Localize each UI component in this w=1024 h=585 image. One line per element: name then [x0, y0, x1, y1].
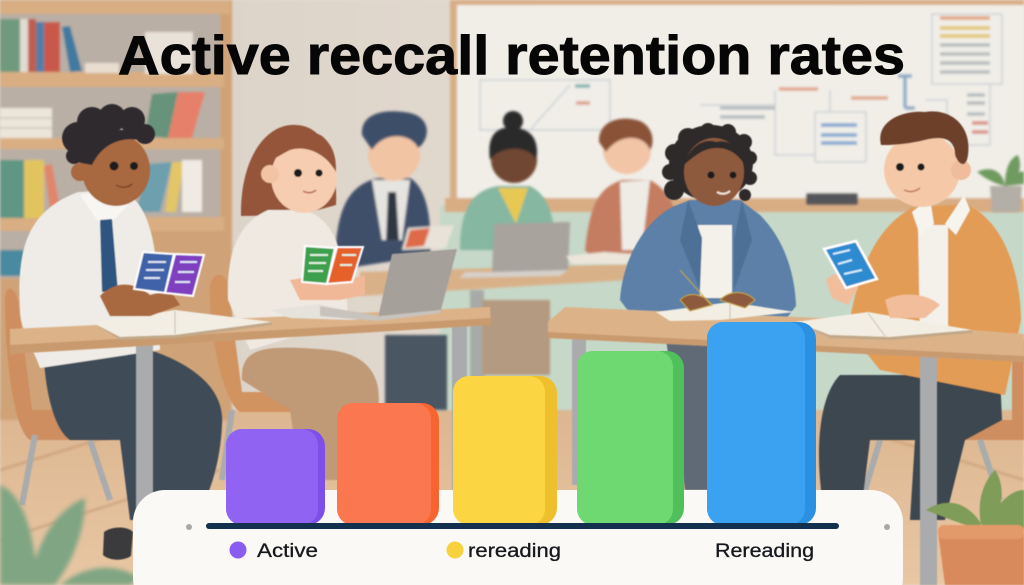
front laptop [270, 249, 457, 321]
open book on left desk [93, 310, 272, 340]
student 7: orange sweater [819, 111, 1021, 520]
student 1 chair [5, 289, 110, 505]
bookshelf [0, 0, 232, 420]
foreground plant left [0, 485, 140, 585]
student 6: blue blazer and curly hair [620, 123, 796, 490]
plant on right ledge [977, 155, 1024, 212]
student 2 hands [290, 275, 365, 300]
background laptop [460, 222, 570, 278]
foreground plant pot right [926, 470, 1024, 585]
whiteboard with diagrams [445, 0, 1024, 212]
axis end dot left [186, 524, 192, 530]
bar: yellow [453, 376, 557, 525]
title: Active reccall retention rates [118, 24, 905, 86]
front left desk [10, 307, 491, 520]
front right desk [548, 307, 1024, 585]
flashcards: green and orange [302, 246, 363, 284]
student 3: blue blazer [335, 111, 454, 410]
student 1 hands [100, 285, 180, 316]
student 2 chair [210, 275, 300, 480]
legend: active: Active [257, 541, 318, 562]
legend: rereading: Rereading [715, 541, 814, 562]
legend: active [230, 541, 318, 562]
bar chart [206, 322, 839, 529]
student 7 chair [865, 340, 1024, 500]
background desk [360, 264, 628, 390]
open books on right desk [656, 302, 972, 340]
bar: blue [707, 322, 816, 525]
student 5: rust jacket [566, 119, 678, 264]
axis end dot right [884, 524, 890, 530]
bar: purple [226, 429, 325, 525]
student 1: white shirt and tie [19, 104, 222, 560]
bar: green [577, 351, 684, 525]
student 4: green cardigan [460, 111, 555, 375]
flashcard: blue [824, 241, 877, 288]
baseline axis [206, 523, 839, 529]
legend: rereading yellow: rereading [468, 541, 561, 562]
student 6 hands and pen [680, 270, 755, 311]
chart panel [133, 490, 903, 585]
student 7 hands [826, 274, 940, 318]
student 2: sweater and long hair [228, 125, 379, 480]
flashcards: blue and purple [134, 252, 204, 296]
bar: orange [337, 403, 439, 525]
